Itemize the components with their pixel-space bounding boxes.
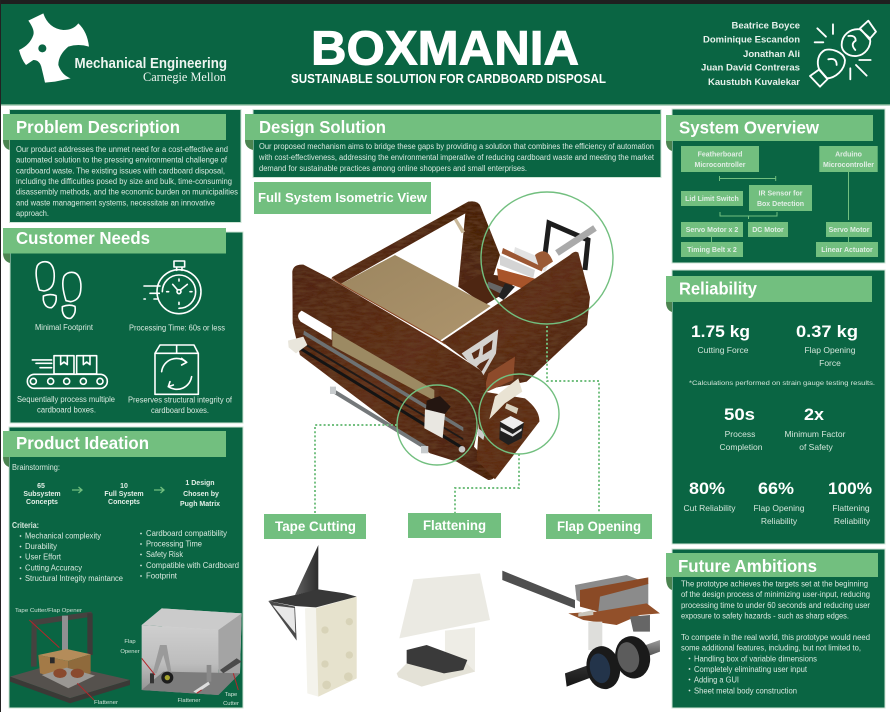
criteria list: Cutting Accuracy [25,564,82,572]
label: flap opening [546,514,652,539]
logo: Mechanical Engineering Carnegie Mellon [19,13,227,84]
system block diagram: Box Detection [757,201,804,208]
base plate [477,392,539,479]
customer need labels: Processing Time: 60s or less [129,324,225,332]
problem text: disassembly methods, and the economic burden on municipalities [16,188,238,197]
arrows: brainstorming [72,487,164,493]
problem text: Our product addresses the unmet need for a cost-effective and [16,145,228,154]
heading: future ambitions: Future Ambitions [678,556,817,576]
stat: flap opening force [796,322,858,368]
system block diagram [681,146,878,257]
customer need labels: Preserves structural integrity of [128,396,233,404]
criteria list: Footprint [146,572,178,580]
system block diagram: DC Motor [752,227,784,234]
concept 2 render [142,608,242,695]
stat: flap opening force: Force [819,358,841,368]
criteria list [12,521,239,583]
stat: cutting force: Cutting Force [697,345,749,355]
stat: cutting force [691,322,750,355]
stat: flap opening force: 0.37 kg [796,322,858,341]
concept 1 labels: Flattener [94,700,118,706]
heading: customer needs: Customer Needs [16,228,150,248]
stat: flap opening reliability: Flap Opening [753,503,805,513]
concept 1 labels: Tape Cutter/Flap Opener [15,608,82,614]
customer need labels: Minimal Footprint [35,323,94,332]
team names: Beatrice Boyce [732,20,800,32]
callout circles [397,192,613,465]
back wall and top rail [332,201,500,302]
team names [701,20,800,88]
stat: factor of safety: 2x [804,405,825,424]
heading: design solution: Design Solution [259,117,386,137]
team names: Jonathan Ali [743,49,800,60]
rails [303,331,463,431]
criteria list: Durability [25,542,57,551]
icon: conveyor with boxes [27,356,107,388]
design solution text: with cost-effectiveness, addressing the environmental imperative of reducing cardboard waste and meeting the market [258,153,655,162]
future ambitions text: To compete in the real world, this prototype would need [681,633,870,642]
stat: cut reliability: Cut Reliability [684,503,736,513]
tape cutter render [268,545,357,697]
stat: flattening reliability: Reliability [834,516,871,526]
design solution text: demand for sustainable practices among online shoppers and small enterprises. [259,164,527,173]
problem text: cardboard waste. The existing issues with cardboard disposal, [16,166,225,175]
brainstorming flow: Pugh Matrix [180,501,220,508]
future ambitions text: of the design process of minimizing user-input, reducing [681,590,870,599]
system block diagram: Microcontroller [695,162,746,169]
logo: Mechanical Engineering Carnegie Mellon: Mechanical Engineering [74,56,227,72]
stat: process completion [720,405,763,452]
future ambitions text: Completely eliminating user input [694,665,808,674]
heading: full system isometric view: Full System Isometric View [258,190,428,205]
stat: factor of safety: Minimum Factor [785,429,846,439]
header banner [1,4,890,106]
footnote: *Calculations performed on strain gauge testing results. [689,380,875,387]
brainstorming flow: 65 [37,483,45,490]
criteria list: Processing Time [146,540,202,548]
customer need labels [17,323,233,415]
heading: problem description: Problem Description [16,117,180,137]
system block diagram: Linear Actuator [821,247,873,254]
problem text: including the difficulties posed by size and bulk, time-consuming [16,177,232,186]
future ambitions text: exposure to safety hazards - such as sharp edges. [681,612,849,620]
machine isometric render [288,201,595,480]
system block diagram: IR Sensor for [759,190,803,198]
front slot [298,311,332,340]
stat: process completion: 50s [724,405,755,424]
right wall [442,252,590,390]
criteria list: Cardboard compatibility [146,529,227,538]
tan strip [332,331,434,401]
brainstorming flow: Full System [104,491,144,498]
flattener render [397,573,490,687]
system block diagram: Servo Motor x 2 [686,227,738,234]
heading: reliability: Reliability [679,278,757,298]
criteria list: User Effort [25,552,62,562]
criteria list: Safety Risk [146,550,183,559]
brainstorming flow: 1 Design [185,480,215,487]
stat: factor of safety: of Safety [799,442,834,452]
title: BOXMANIA [311,22,579,76]
system block diagram: Servo Motor [829,227,870,234]
concept 1 render [10,612,130,703]
concept 2 labels: Cutter [223,701,239,707]
heading: system overview: System Overview [679,118,819,138]
label: tape cutting [264,514,366,539]
stat: cut reliability [684,479,736,513]
future ambitions text: processing time to under 60 seconds and reducing user [681,601,870,610]
future ambitions text: some additional features, including, but not limited to, [681,644,861,652]
panel: design solution [245,110,661,178]
customer need labels: cardboard boxes. [151,406,209,415]
right wall window [462,329,498,378]
system block diagram: Featherboard [698,152,742,158]
team names: Dominique Escandon [703,34,800,46]
panel: product ideation [3,427,243,708]
brainstorming flow: Chosen by [183,491,219,498]
stat: flattening reliability [828,479,872,526]
icon: footprints [36,262,81,318]
system block diagram: Arduino [835,152,862,158]
front panel [292,265,495,480]
stat: process completion: Completion [720,442,763,452]
future ambitions text: The prototype achieves the targets set at the beginning [681,580,868,588]
subtitle: SUSTAINABLE SOLUTION FOR CARDBOARD DISPOSAL [291,71,606,86]
stat: flattening reliability: 100% [828,479,872,498]
system block diagram: Timing Belt x 2 [687,247,737,254]
stat: cut reliability: 80% [689,479,725,498]
system block diagram: Lid Limit Switch [685,196,739,203]
panel: customer needs [3,228,243,423]
team names: Kaustubh Kuvalekar [708,77,800,88]
problem text: approach. [16,209,49,218]
brainstorming flow [23,480,220,508]
brainstorming label: Brainstorming: [12,463,60,472]
stat: flap opening reliability [753,479,805,526]
label: flattening: Flattening [423,518,486,533]
label: tape cutting: Tape Cutting [275,519,356,534]
design solution text [258,142,655,173]
panel: reliability [666,270,885,544]
concept 2 labels: Tape [225,692,237,698]
icon: box with recycle arrows [155,345,198,394]
stat: cutting force: 1.75 kg [691,322,750,341]
stat: flap opening reliability: Reliability [761,516,798,526]
future ambitions text: Adding a GUI [694,676,739,684]
cardboard [341,255,491,341]
panel: system overview [666,109,885,263]
concept 2 labels: Flattener [178,698,201,704]
interior floor [458,273,517,305]
stat: process completion: Process [725,429,755,439]
future ambitions text: Handling box of variable dimensions [694,654,817,664]
flattener and motor [489,378,522,419]
problem text [16,145,238,218]
heading: full system isometric view [254,182,431,214]
brainstorming flow: Concepts [108,499,140,506]
panel: problem description [3,110,241,222]
criteria list: Mechanical complexity [25,532,101,540]
panel: future ambitions [666,549,885,708]
concept 2 labels [120,639,239,707]
icon: stopwatch [144,261,201,314]
brainstorming flow: 10 [120,483,128,490]
icon: boxing gloves [810,21,876,87]
customer need labels: Sequentially process multiple [17,395,115,404]
logo: Mechanical Engineering Carnegie Mellon: Carnegie Mellon [143,70,227,84]
heading: product ideation: Product Ideation [16,433,149,453]
upper mechanism [487,223,595,300]
problem text: automated solution to the pressing environmental challenge of [16,156,228,165]
stat: flap opening reliability: 66% [758,479,794,498]
stat: factor of safety [785,405,846,452]
criteria list: Compatible with Cardboard [146,561,239,570]
team names: Juan David Contreras [701,62,800,74]
dotted connectors [315,326,599,514]
future ambitions text: Sheet metal body construction [694,686,797,696]
concept 2 labels: Flap [124,639,136,645]
concept 2 labels: Opener [120,649,140,655]
brainstorming flow: Subsystem [23,491,61,498]
stat: flattening reliability: Flattening [832,503,870,513]
criteria list: Structural Intregity maintance [25,574,123,583]
flap opener render [502,571,660,692]
problem text: and waste management systems, necessitate an innovative [16,198,215,207]
stat: flap opening force: Flap Opening [804,345,856,355]
future ambitions text [681,580,870,696]
system block diagram: Microcontroller [823,162,874,169]
customer need labels: cardboard boxes. [37,406,96,414]
criteria list: Criteria: [12,521,39,530]
label: flap opening: Flap Opening [557,519,641,534]
concept 1 labels [15,608,118,706]
design solution text: Our proposed mechanism aims to bridge these gaps by providing a solution that combines the efficiency of automation [259,142,654,151]
brainstorming flow: Concepts [26,499,58,506]
label: flattening [408,513,501,538]
cutter block [426,396,451,414]
